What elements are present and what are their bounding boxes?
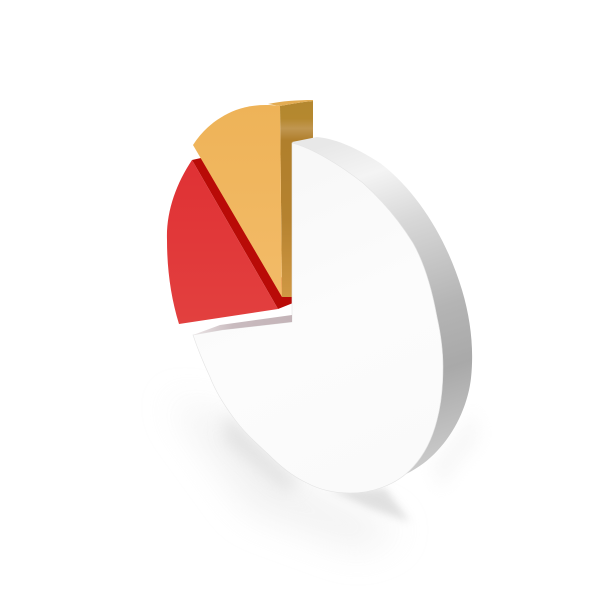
notch shadow <box>193 315 292 335</box>
orange slice face <box>193 105 282 297</box>
white pie body <box>193 137 472 493</box>
orange slice top cap <box>268 100 313 106</box>
orange slice <box>193 100 313 297</box>
orange slice side <box>280 101 313 297</box>
white body side <box>292 137 472 474</box>
red slice face <box>167 160 278 324</box>
ground shadow <box>170 400 480 550</box>
red slice side <box>192 158 293 309</box>
red slice <box>167 158 293 324</box>
white body face <box>193 143 443 493</box>
